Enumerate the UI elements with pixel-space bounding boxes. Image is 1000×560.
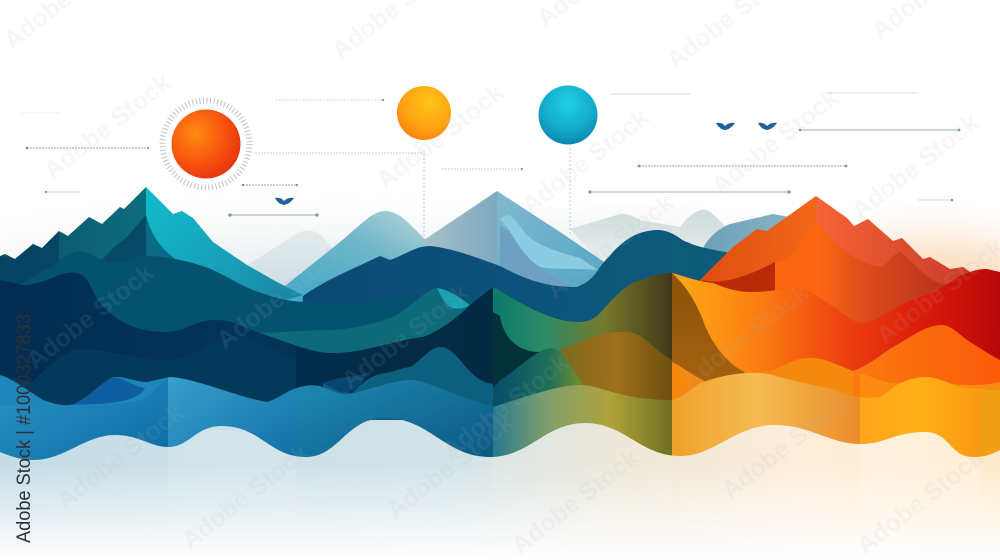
icon: bird (716, 123, 735, 130)
watermarks: Adobe Stock (38, 69, 176, 185)
icon: bird (758, 123, 777, 130)
watermarks: Adobe Stock (381, 409, 519, 525)
mountains: orange peak (700, 196, 975, 330)
pale reflection under the waves (0, 420, 1000, 546)
watermarks: Adobe Stock (211, 239, 349, 355)
layer: royal blue patch (70, 377, 145, 405)
watermarks: Adobe Stock (21, 259, 159, 375)
mountains: left peak, inner shade (146, 215, 180, 290)
watermarks: Adobe Stock (176, 439, 314, 555)
layer: deep lower hill (0, 335, 296, 420)
layer: brown hill (560, 332, 672, 410)
layer: olive-green small hill (493, 348, 590, 420)
layer: red-orange sweep (672, 269, 1000, 420)
annotation leader lines (22, 93, 960, 238)
icon: bird (275, 198, 294, 205)
layer: amber wedge (672, 273, 745, 395)
mountains: pale distant left (243, 230, 368, 310)
layer: cyan highlight (437, 288, 470, 309)
watermarks: Adobe Stock (516, 104, 654, 220)
layer: dark hollow (493, 312, 560, 400)
watermarks: Adobe Stock (506, 444, 644, 560)
watermarks: Adobe Stock (51, 399, 189, 515)
mountains: left peak, lit face (146, 187, 303, 310)
sun: blue (538, 86, 598, 144)
sun: yellow (397, 86, 451, 140)
layer: light-blue left wave (0, 375, 170, 420)
mountains: pale distant right (570, 210, 800, 262)
layer: teal foothill (0, 251, 480, 420)
fold shading: centre (296, 287, 493, 420)
watermarks: Adobe Stock (676, 279, 814, 395)
watermarks: Adobe Stock (846, 109, 984, 225)
reflection folds (868, 432, 979, 472)
mountains: dark-blue ridge (296, 230, 730, 420)
layer: front red-orange peak (853, 325, 1000, 400)
mountains: left peak, shadowed face (0, 187, 150, 300)
mountains: light blue centre-left (270, 211, 445, 310)
layer: orange low band (860, 373, 1000, 420)
mountains: left peak, lower shadow (0, 215, 160, 300)
layer: orange mid band (672, 358, 860, 420)
mountains: grey-blue centre peak (420, 191, 607, 300)
watermarks: Adobe Stock (706, 84, 844, 200)
sun: orange with ray ring (162, 100, 250, 188)
front band with colour sections (0, 370, 1000, 465)
watermarks: Adobe Stock (371, 79, 509, 195)
layer: teal slab (260, 288, 470, 353)
haze behind mountains (0, 230, 1000, 315)
watermarks: Adobe Stock (851, 444, 989, 560)
layer: navy mid-ground (0, 273, 497, 420)
watermarks: Adobe Stock (716, 389, 854, 505)
watermarks: Adobe Stock (436, 349, 574, 465)
stock image id caption: Adobe Stock | #1000327833 (14, 314, 35, 543)
layer: green-olive ridge (493, 273, 672, 420)
watermarks: Adobe Stock (336, 279, 474, 395)
watermarks: Adobe Stock (541, 189, 679, 305)
layer: teal wave (323, 347, 493, 420)
layer: blue patch (323, 373, 367, 392)
